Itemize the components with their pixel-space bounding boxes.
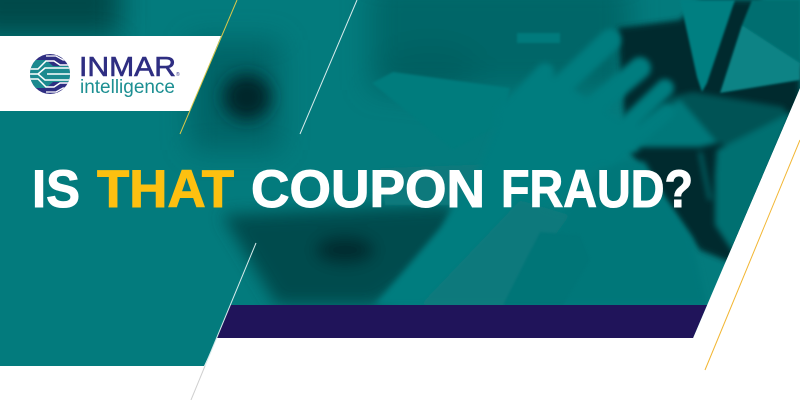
title: COUPON: [251, 160, 485, 219]
decorative white line top: [300, 0, 357, 134]
dark area behind hands: [618, 0, 800, 262]
second hand and forearm: [634, 158, 709, 305]
collar left: [680, 0, 735, 92]
title: THAT: [97, 160, 234, 219]
logo: [30, 51, 180, 98]
decorative yellow line top: [180, 0, 237, 134]
decorative yellow line right: [705, 140, 800, 370]
title: IS: [32, 160, 80, 219]
logo tagline: intelligence: [80, 77, 175, 98]
collar right: [720, 25, 800, 93]
booklet: [374, 72, 508, 104]
icon: circuit globe: [30, 54, 72, 94]
purple bar: [217, 305, 707, 338]
title: FRAUD?: [501, 160, 693, 219]
decorative line bottom: [205, 243, 256, 366]
held coupons: [659, 90, 788, 147]
top right garment: [742, 0, 800, 63]
logo banner: [0, 36, 221, 111]
registered mark: ®: [176, 71, 180, 78]
hand palm and fingers: [375, 75, 640, 305]
tablet edge: [504, 232, 556, 304]
logo wordmark: INMAR: [79, 51, 176, 82]
title: [32, 160, 693, 219]
